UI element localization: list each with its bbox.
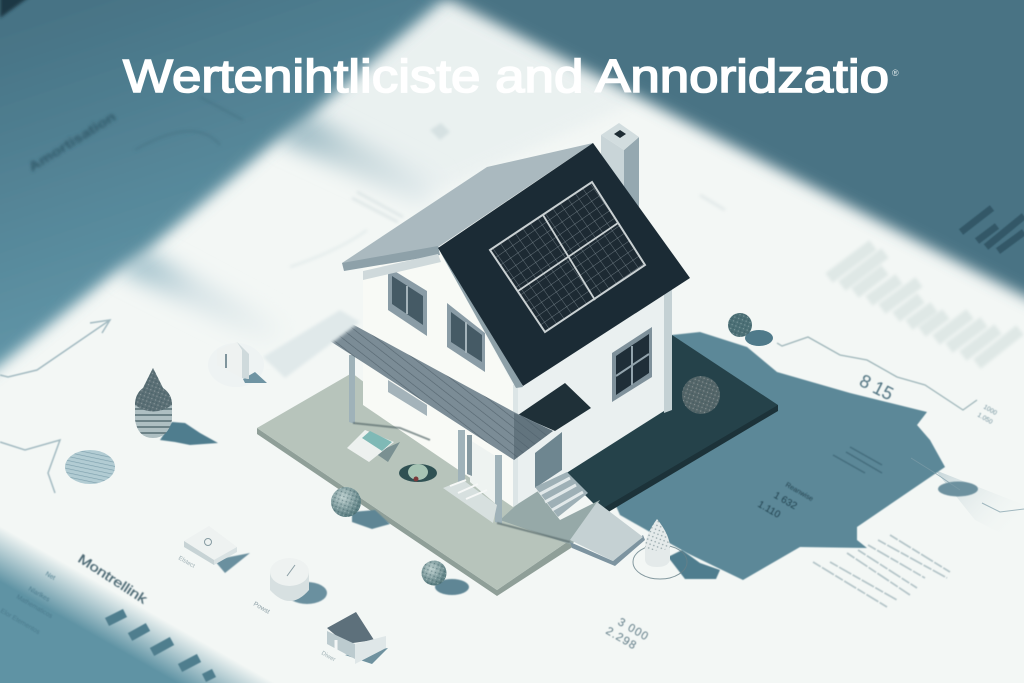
- tablet on slab: [347, 430, 400, 462]
- bar chart: top right dark: [961, 208, 1024, 251]
- device: cylinder: Powst: [252, 601, 271, 616]
- shrub: lower: [422, 560, 469, 595]
- heading: amortisation: Amortisation: [26, 109, 118, 175]
- house shadow: [600, 332, 945, 580]
- cone tree: left: [135, 368, 218, 445]
- lower right labels: 1000: [982, 404, 998, 417]
- figures: bottom center: 2.298: [604, 625, 639, 652]
- porch roof: [330, 319, 553, 460]
- line chart: right: [777, 337, 977, 410]
- callout figures: [756, 482, 814, 521]
- left arrow chart: [0, 320, 110, 493]
- cone tree: right: [633, 519, 720, 579]
- plant: [399, 464, 437, 482]
- bar chart: right: [829, 245, 1020, 364]
- side steps: [535, 472, 588, 517]
- shrub: lawn ball: [682, 376, 720, 414]
- lower left table text: Mathematicos: [15, 594, 54, 620]
- shrub: slab front: [331, 487, 390, 529]
- front steps: [443, 480, 497, 523]
- porch columns: [349, 355, 502, 524]
- callout figures: 1.110: [756, 499, 782, 521]
- mini house icon: [320, 612, 388, 664]
- title: Wertenihtliciste and Annoridzatio: [123, 50, 889, 102]
- porch wall doorway: [470, 440, 497, 505]
- upper window 2: [447, 303, 485, 372]
- upper window 1: [388, 267, 427, 336]
- right window: [612, 327, 652, 402]
- shrub: top right: [728, 313, 773, 346]
- wall: right: [513, 293, 664, 507]
- bar chart: lower left: [107, 613, 214, 678]
- device: cylinder: [252, 558, 327, 616]
- lower right labels: 1.050: [976, 412, 994, 426]
- title: ®: [892, 68, 899, 78]
- ground shadow by steps: [500, 488, 600, 545]
- lawn: [560, 335, 778, 517]
- wall: left: [363, 252, 513, 507]
- paragraph lines: [813, 535, 950, 607]
- building: [330, 123, 690, 566]
- heading: monitoring: Montrellink: [75, 552, 150, 607]
- lower left table text: Net: [44, 571, 56, 582]
- chimney: [601, 123, 639, 210]
- striped disc: [65, 450, 115, 484]
- small house icon: upper left: [208, 310, 360, 387]
- figures: bottom center: [604, 616, 651, 652]
- slab: [257, 373, 574, 596]
- lower left table text: Nlarlkes: [27, 586, 51, 604]
- upper paragraph in shadow: [833, 447, 882, 473]
- callout figures: Reanwise: [784, 482, 814, 503]
- device: box: Elstect: [177, 556, 196, 570]
- corner pipe: [664, 289, 672, 413]
- pane tint: [307, 0, 640, 190]
- blue oval marker: [938, 482, 978, 496]
- mullion shadow 2: [117, 250, 292, 348]
- path: [570, 502, 645, 566]
- lower right labels: [756, 404, 998, 607]
- porch shadow strokes: [353, 423, 570, 542]
- faint document content: upper left: [26, 97, 725, 267]
- mullion shadow 1: [277, 113, 440, 208]
- figures: bottom center: 3 000: [616, 616, 651, 643]
- solar panel: [490, 182, 645, 332]
- mini house icon: Diwer: [320, 651, 336, 663]
- lower window: [388, 380, 427, 416]
- awning: dark: [518, 383, 591, 431]
- device: box: [177, 526, 250, 573]
- lower left table text: [0, 571, 56, 636]
- value: 815: 8 15: [856, 371, 896, 404]
- door: [535, 432, 562, 488]
- soft lower right shadow: [935, 470, 1024, 545]
- roof: dark side: [438, 143, 690, 388]
- callout figures: 1 632: [772, 490, 799, 512]
- lower left table text: Elor Etementos: [0, 608, 42, 636]
- roof: light side: [342, 143, 593, 269]
